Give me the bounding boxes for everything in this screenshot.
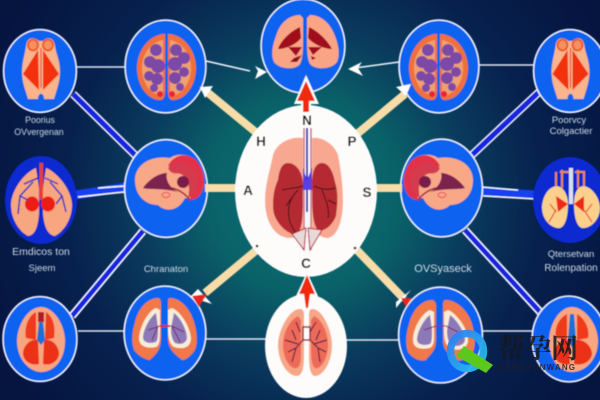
circle: upper left brain-like organ: [125, 20, 206, 113]
centre lungs: [265, 128, 343, 250]
label: top left: Poorius: [25, 115, 56, 125]
circle: bottom left organ: [3, 296, 77, 382]
beige thick connectors: [205, 92, 405, 299]
label: middle left: Sjeem: [29, 263, 56, 274]
circle: middle left lungs: [5, 156, 77, 244]
red arrow: up from bottom circle: [296, 272, 318, 308]
circle: top left organ: [4, 30, 76, 112]
white arrow: upper left to top centre: [206, 61, 267, 79]
letter C: C: [301, 256, 311, 271]
letter H: H: [256, 134, 266, 149]
watermark: text: 帮孕网: [498, 333, 578, 364]
label: lower left: Chranaton: [144, 264, 188, 275]
label: middle right: Qtersetvan: [548, 249, 594, 260]
connectors: blue double lines: [72, 92, 541, 316]
label: middle left: [12, 246, 70, 274]
label: middle right: [544, 249, 598, 274]
circle: bottom left lungs: [124, 286, 206, 380]
label: top left: [14, 115, 64, 137]
marker dots: [256, 245, 356, 249]
arrowhead: to upper right circle: [396, 84, 411, 96]
label: top right: [550, 115, 592, 137]
circle: middle right lungs: [533, 157, 600, 243]
bottom centre white circle with lungs: [265, 294, 347, 398]
circle: middle right heart organ: [400, 139, 482, 237]
arrowhead: to lower left circle: [190, 289, 212, 307]
circle: bottom right organ: [532, 296, 600, 382]
label: middle left: Emdicos ton: [12, 246, 70, 258]
circle: middle left heart organ: [124, 140, 208, 238]
arrowhead: to upper left circle: [200, 86, 213, 98]
watermark: text: BANGYUNWANG: [498, 363, 575, 372]
label: middle right: Rolenpation: [544, 263, 598, 274]
white arrow: upper right to top centre: [348, 62, 399, 76]
letter P: P: [347, 134, 357, 149]
circle: upper right brain-like organ: [399, 20, 479, 113]
label: top right: Colgactier: [550, 126, 592, 137]
label: top left: OVvergenan: [14, 127, 64, 137]
letter N: N: [302, 113, 312, 128]
watermark: magnifier icon: [450, 334, 493, 373]
letter S: S: [362, 185, 372, 200]
connectors: thin white lines: [77, 65, 534, 340]
circle: top right organ: [534, 30, 600, 112]
centre white circle: [235, 105, 377, 277]
red arrow: up into top circle: [294, 75, 319, 112]
letter A: A: [243, 183, 253, 198]
arrowhead: to lower right circle: [396, 290, 412, 308]
circle: bottom right lungs: [398, 287, 482, 383]
circle: top centre lungs: [261, 0, 345, 93]
label: lower right: OVSyaseck: [414, 263, 472, 275]
label: top right: Poorvcy: [552, 115, 586, 126]
